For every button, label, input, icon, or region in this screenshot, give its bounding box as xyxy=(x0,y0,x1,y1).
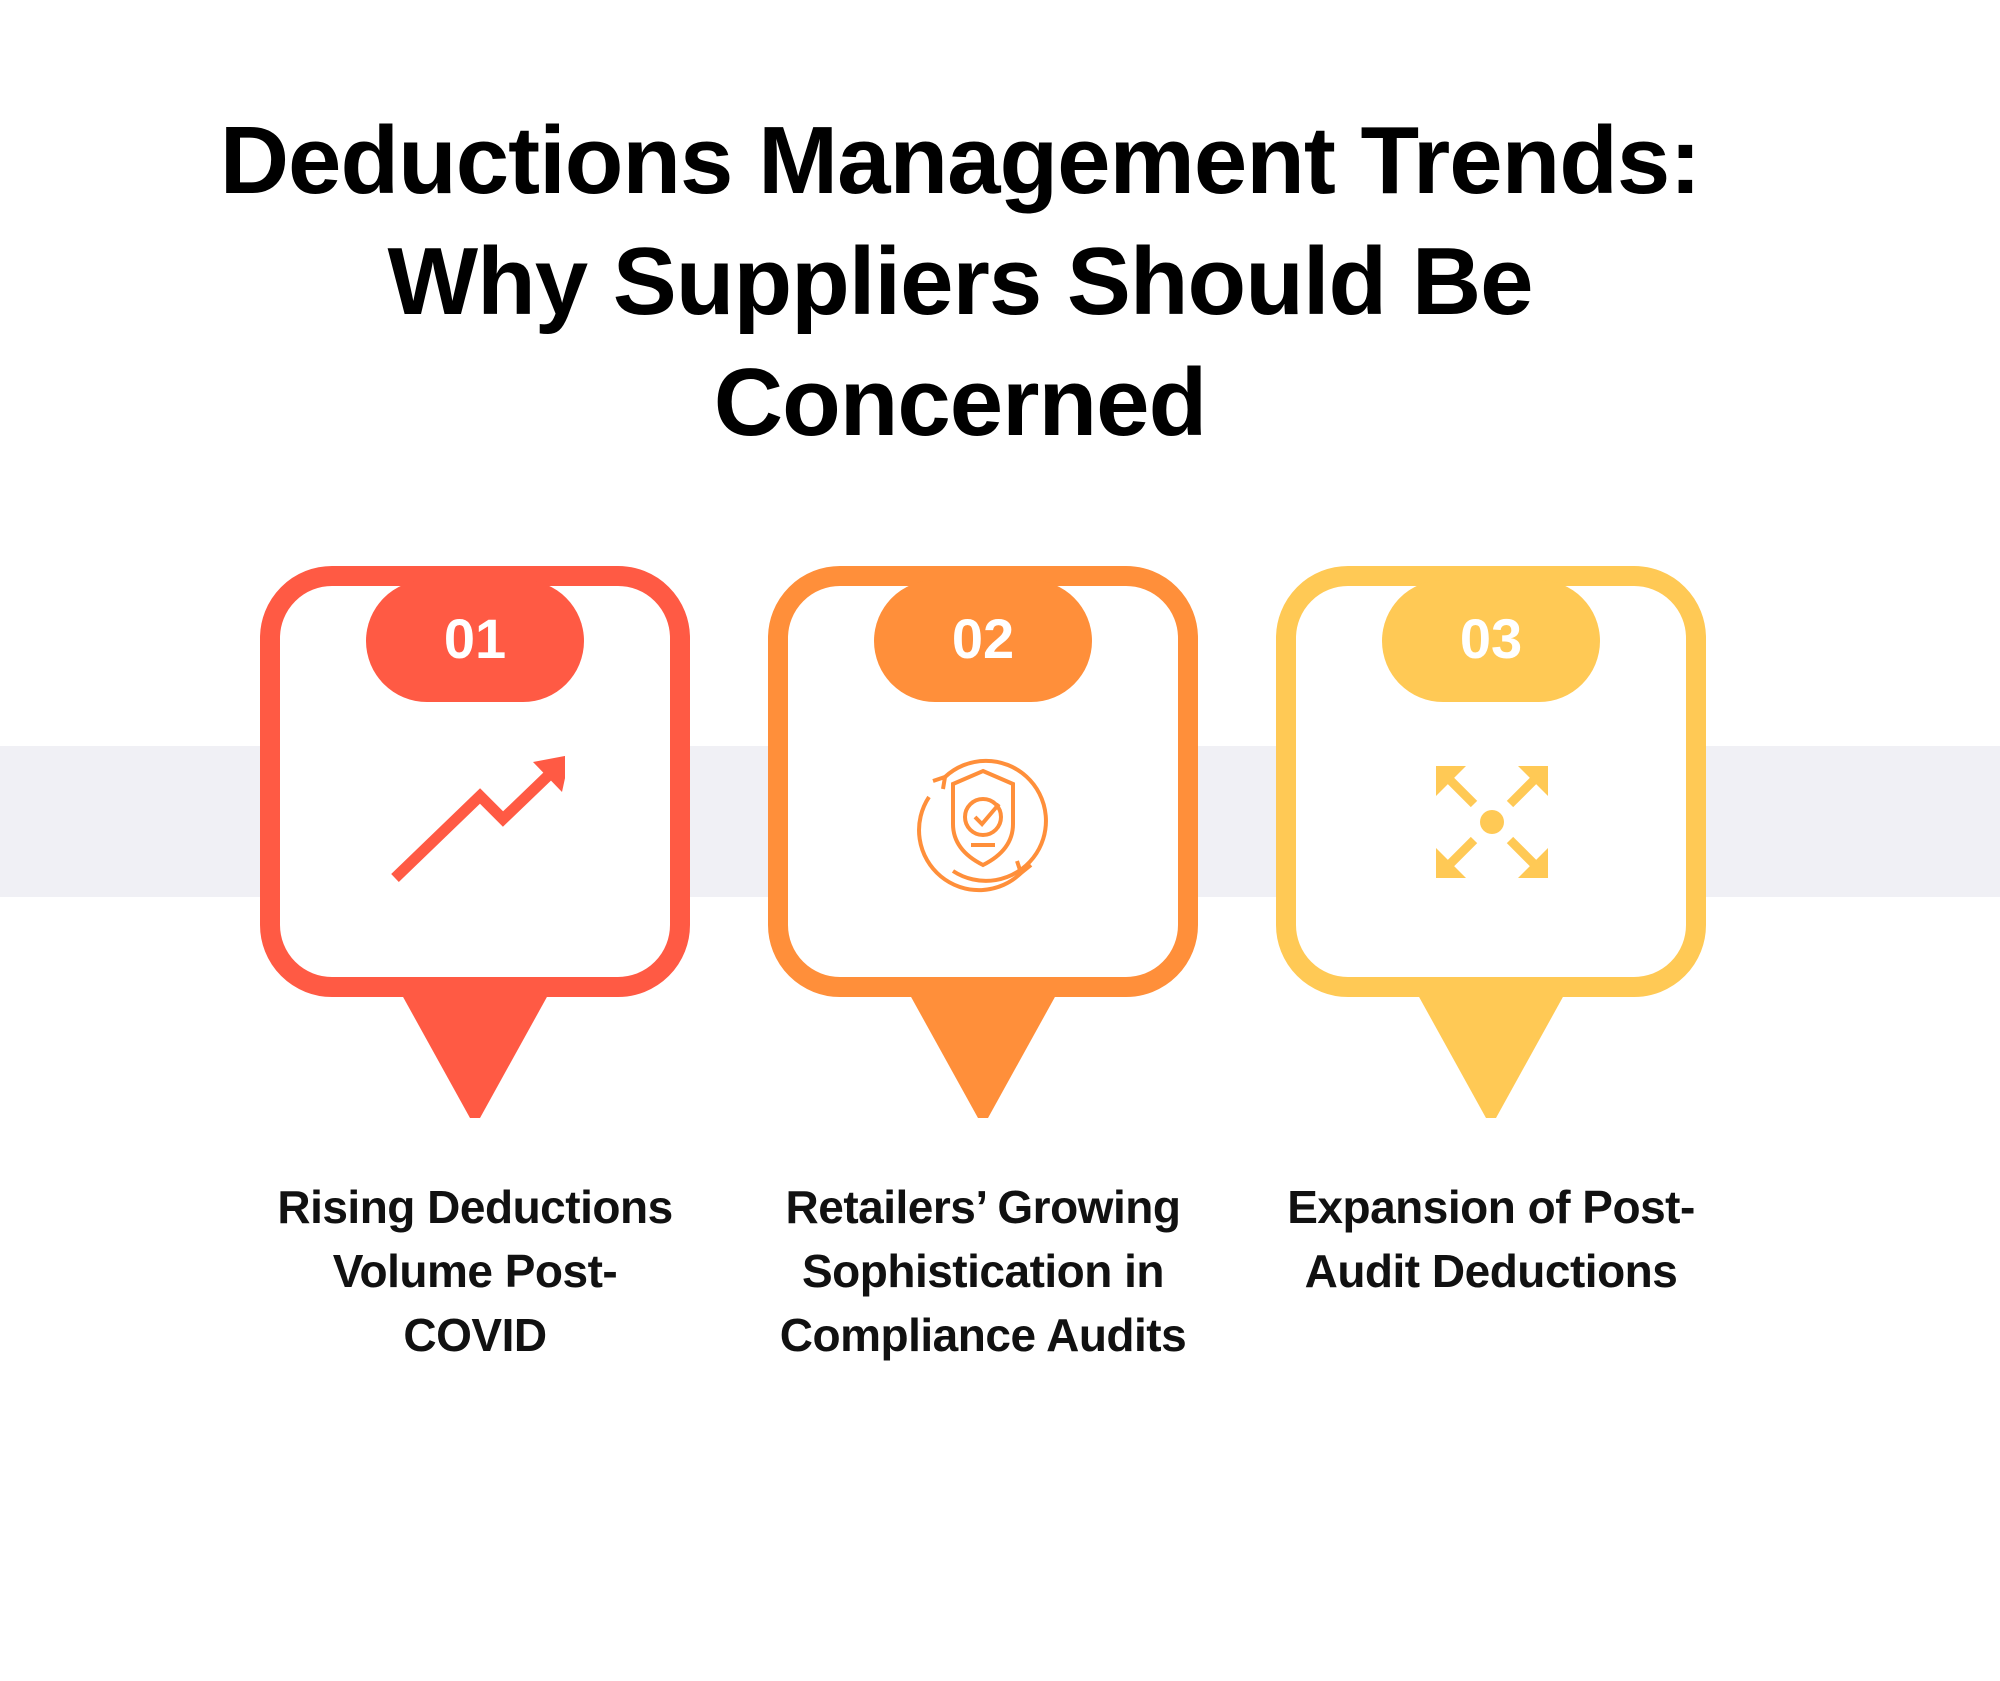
title: Why Suppliers Should Be xyxy=(387,228,1533,335)
label 2: Sophistication in xyxy=(802,1245,1164,1297)
title: Concerned xyxy=(714,349,1206,456)
background band xyxy=(0,746,2000,897)
label 1: COVID xyxy=(403,1309,547,1361)
label 2: Retailers’ Growing xyxy=(786,1181,1180,1233)
card 1 xyxy=(260,566,690,1118)
number 01: 01 xyxy=(444,607,506,670)
icon: shield check xyxy=(917,758,1048,892)
label 3 xyxy=(1287,1181,1695,1297)
number 02 xyxy=(874,580,1092,702)
box 3 xyxy=(1276,566,1706,997)
label 3: Expansion of Post- xyxy=(1287,1181,1695,1233)
label 2 xyxy=(780,1181,1186,1361)
number 02: 02 xyxy=(952,607,1014,670)
label 3: Audit Deductions xyxy=(1305,1245,1677,1297)
title: Deductions Management Trends: xyxy=(220,107,1700,214)
box 1 xyxy=(260,566,690,997)
pointer 2 xyxy=(911,997,1055,1118)
label 1: Rising Deductions xyxy=(277,1181,673,1233)
label 2: Compliance Audits xyxy=(780,1309,1186,1361)
number 03 xyxy=(1382,580,1600,702)
icon: expand arrows xyxy=(1436,766,1548,878)
label 1: Volume Post- xyxy=(333,1245,617,1297)
pointer 3 xyxy=(1419,997,1563,1118)
number 01 xyxy=(366,580,584,702)
box 2 xyxy=(768,566,1198,997)
card 2 xyxy=(768,566,1198,1118)
icon: trending arrow xyxy=(391,756,565,882)
title xyxy=(220,107,1700,456)
number 03: 03 xyxy=(1460,607,1522,670)
pointer 1 xyxy=(403,997,547,1118)
card 3 xyxy=(1276,566,1706,1118)
label 1 xyxy=(277,1181,673,1361)
